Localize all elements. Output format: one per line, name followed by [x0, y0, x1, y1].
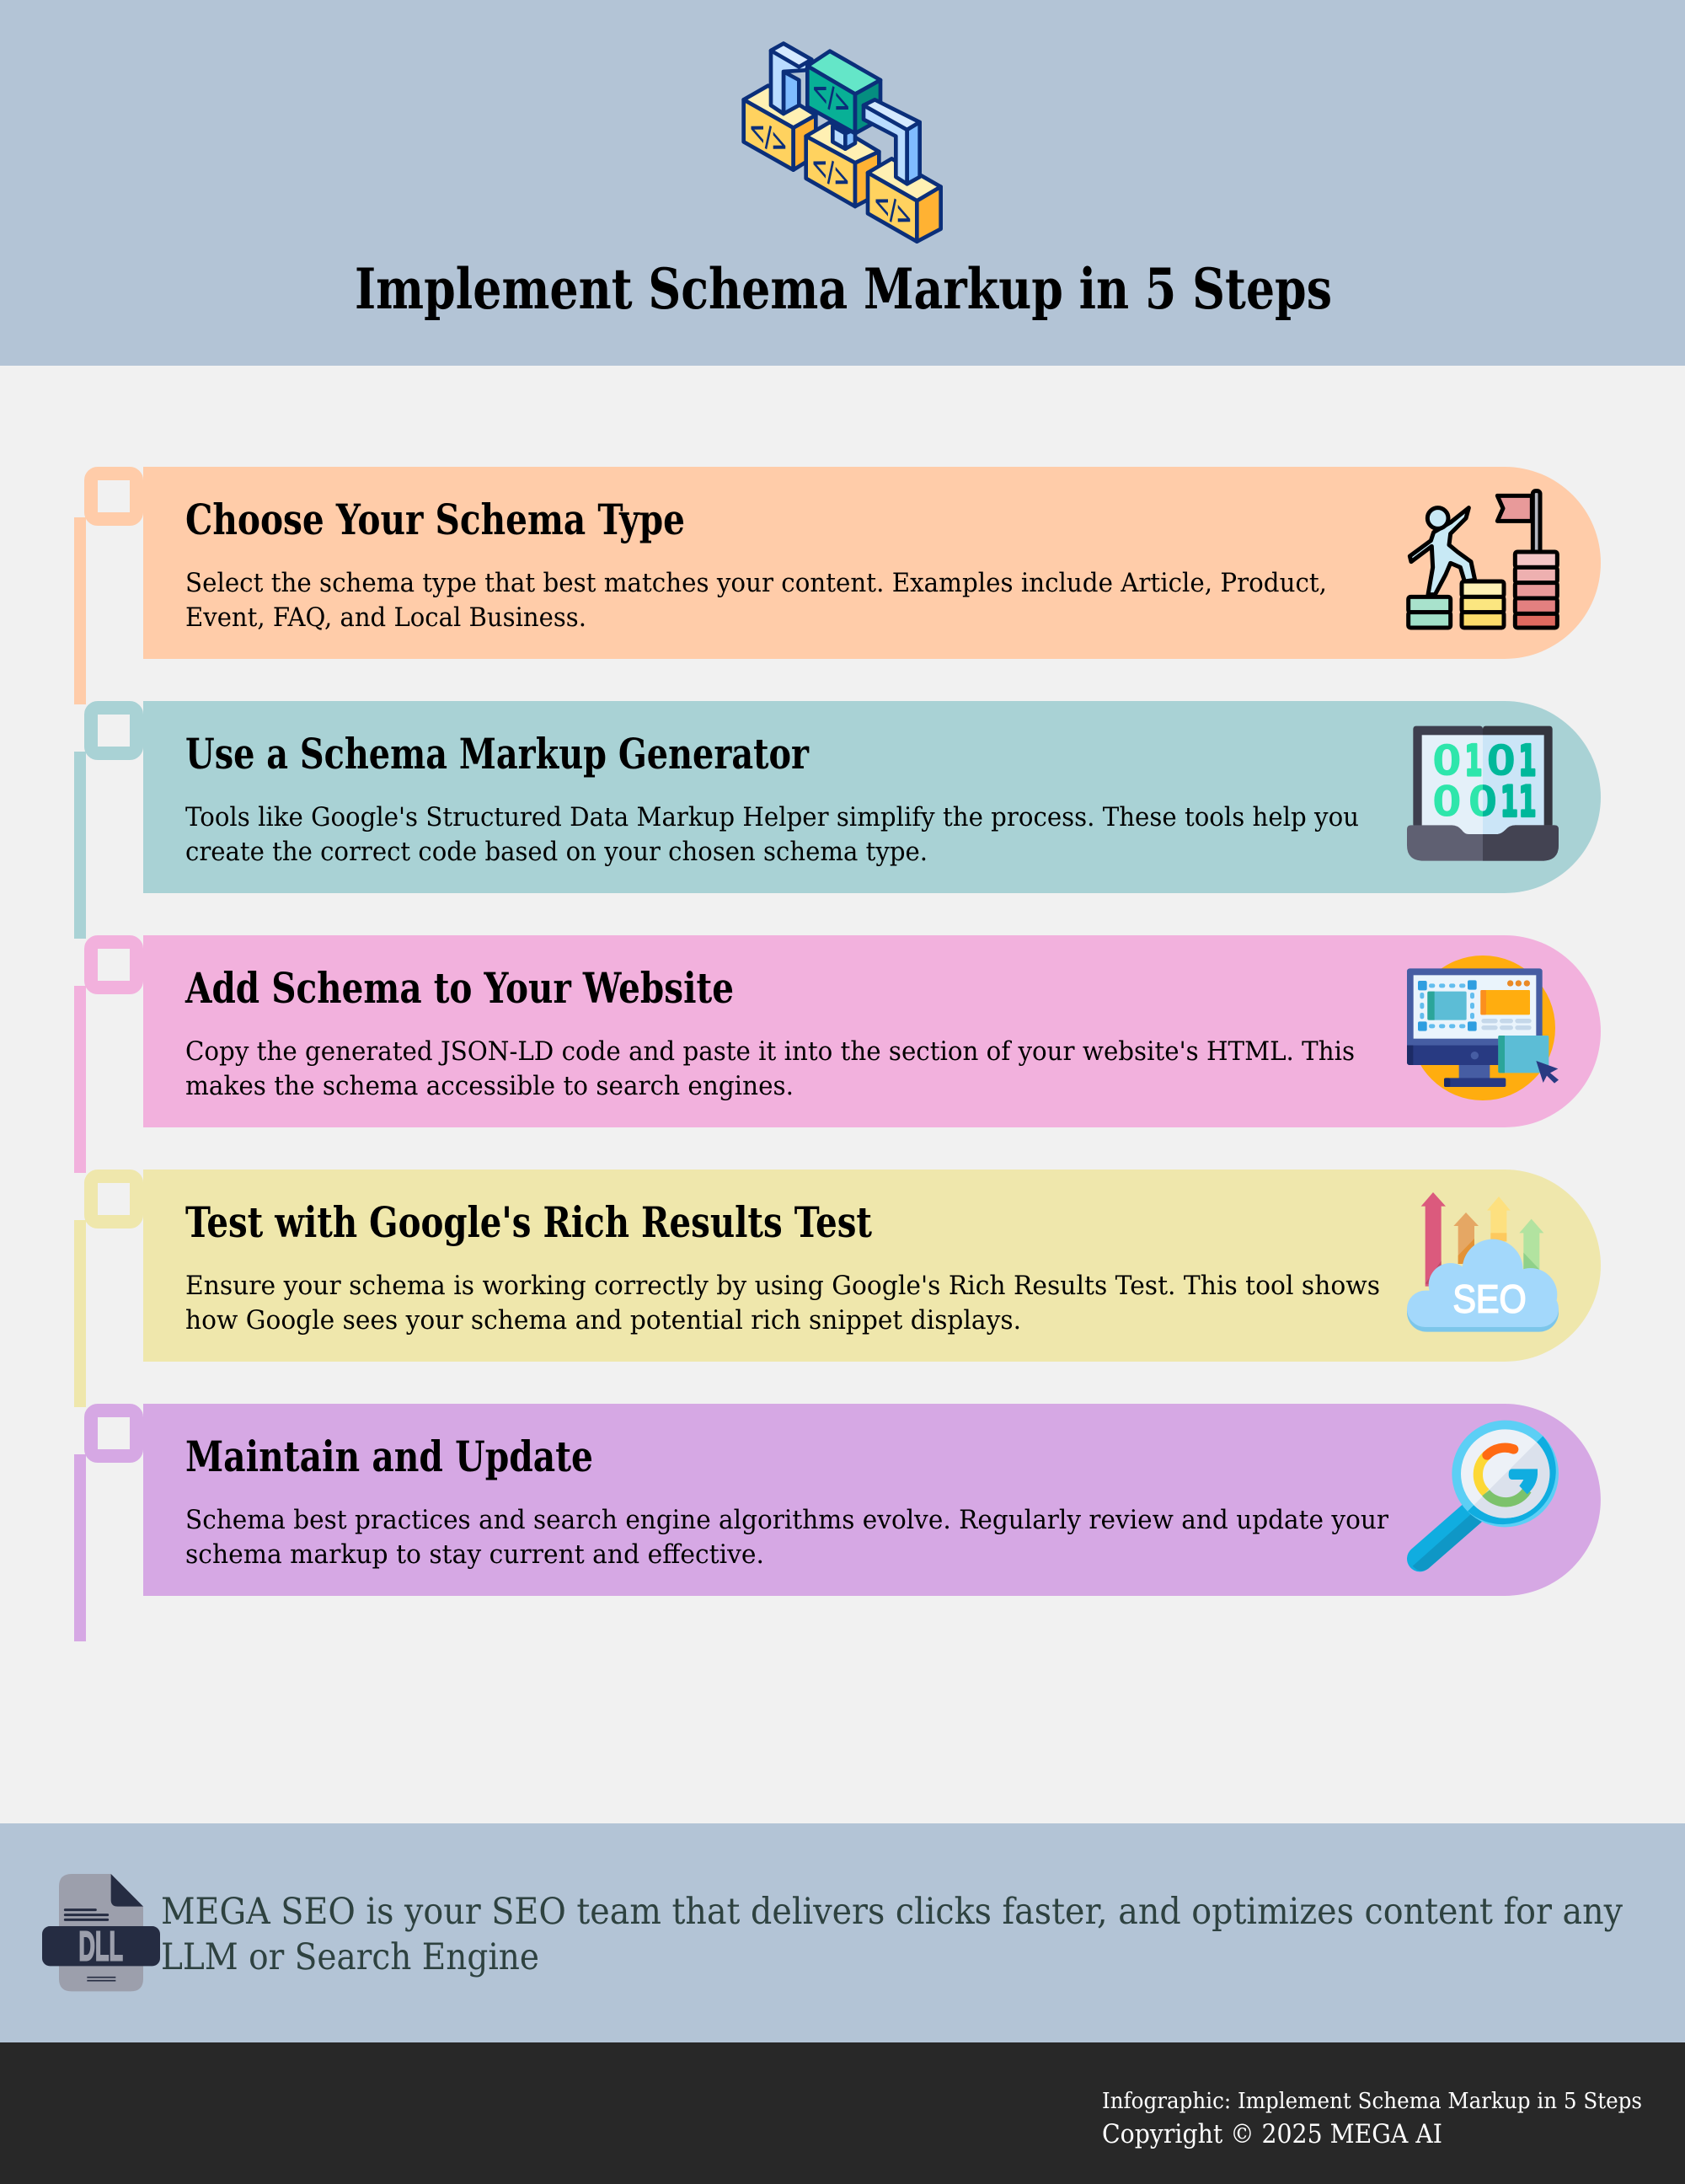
- step 2 text: [185, 802, 1359, 867]
- step 4 text: [185, 1271, 1380, 1336]
- step 4 text: Ensure your schema is working correctly by using Google's Rich Results Test. This tool shows: [185, 1271, 1380, 1301]
- step 3 text: makes the schema accessible to search engines.: [185, 1071, 794, 1101]
- step 2 text: Tools like Google's Structured Data Markup Helper simplify the process. These tools help you: [185, 802, 1359, 832]
- step 5 text: schema markup to stay current and effective.: [185, 1539, 764, 1570]
- step 1 text: Select the schema type that best matches your content. Examples include Article, Product,: [185, 568, 1327, 598]
- step 4 panel: [74, 1170, 1601, 1407]
- step 3 text: Copy the generated JSON-LD code and paste it into the section of your website's HTML. This: [185, 1036, 1355, 1067]
- header band: [0, 0, 1685, 366]
- icon: Google magnifying glass: [1413, 1421, 1559, 1571]
- step 1 panel: [74, 467, 1601, 704]
- step 2 panel: [74, 701, 1601, 939]
- step 4 text: how Google sees your schema and potential rich snippet displays.: [185, 1305, 1021, 1336]
- title: Implement Schema Markup in 5 Steps: [355, 256, 1332, 322]
- step 4 heading: Test with Google's Rich Results Test: [185, 1197, 872, 1247]
- step 5 text: [185, 1505, 1388, 1570]
- icon: DLL file: [42, 1874, 160, 1991]
- copyright bar: [0, 2042, 1685, 2184]
- icon: SEO cloud with arrows: SEO: [1452, 1277, 1527, 1320]
- step 1 heading: Choose Your Schema Type: [185, 495, 685, 544]
- icon: laptop with binary: 0: [1432, 777, 1462, 826]
- icon: laptop with binary: 1: [1500, 777, 1518, 826]
- step 1 text: [185, 568, 1327, 633]
- step 3 panel: [74, 935, 1601, 1173]
- icon: climbing steps to flag: [1409, 491, 1557, 628]
- footer promo band: [0, 1823, 1685, 2042]
- icon: laptop with binary: [1407, 726, 1559, 861]
- copyright text: Copyright © 2025 MEGA AI: [1102, 2119, 1442, 2149]
- icon: DLL file: DLL: [78, 1924, 123, 1970]
- copyright text: [1102, 2089, 1642, 2149]
- promo text: [161, 1891, 1623, 1978]
- step 3 heading: Add Schema to Your Website: [185, 963, 734, 1013]
- icon: schema blocks: [744, 44, 941, 242]
- icon: schema blocks: </>: [811, 144, 849, 201]
- icon: laptop with binary: 0: [1468, 777, 1497, 826]
- icon: laptop with binary: 1: [1465, 736, 1483, 785]
- step 5 panel: [74, 1404, 1601, 1641]
- step 5 text: Schema best practices and search engine algorithms evolve. Regularly review and update your: [185, 1505, 1388, 1535]
- copyright text: Infographic: Implement Schema Markup in 5 Steps: [1102, 2089, 1642, 2114]
- icon: laptop with binary: 0: [1486, 736, 1516, 785]
- step 2 heading: Use a Schema Markup Generator: [185, 729, 810, 779]
- icon: schema blocks: </>: [874, 182, 912, 238]
- icon: laptop with binary: 1: [1519, 736, 1537, 785]
- step 5 heading: Maintain and Update: [185, 1432, 593, 1481]
- icon: SEO cloud with arrows: [1407, 1192, 1559, 1332]
- step 1 text: Event, FAQ, and Local Business.: [185, 602, 586, 633]
- promo text: LLM or Search Engine: [161, 1936, 539, 1978]
- icon: laptop with binary: 0: [1432, 736, 1462, 785]
- icon: website monitor: [1407, 956, 1559, 1100]
- step 3 text: [185, 1036, 1355, 1101]
- icon: laptop with binary: 1: [1519, 777, 1537, 826]
- icon: schema blocks: </>: [812, 70, 850, 126]
- icon: schema blocks: </>: [749, 109, 787, 166]
- step 2 text: create the correct code based on your chosen schema type.: [185, 837, 928, 867]
